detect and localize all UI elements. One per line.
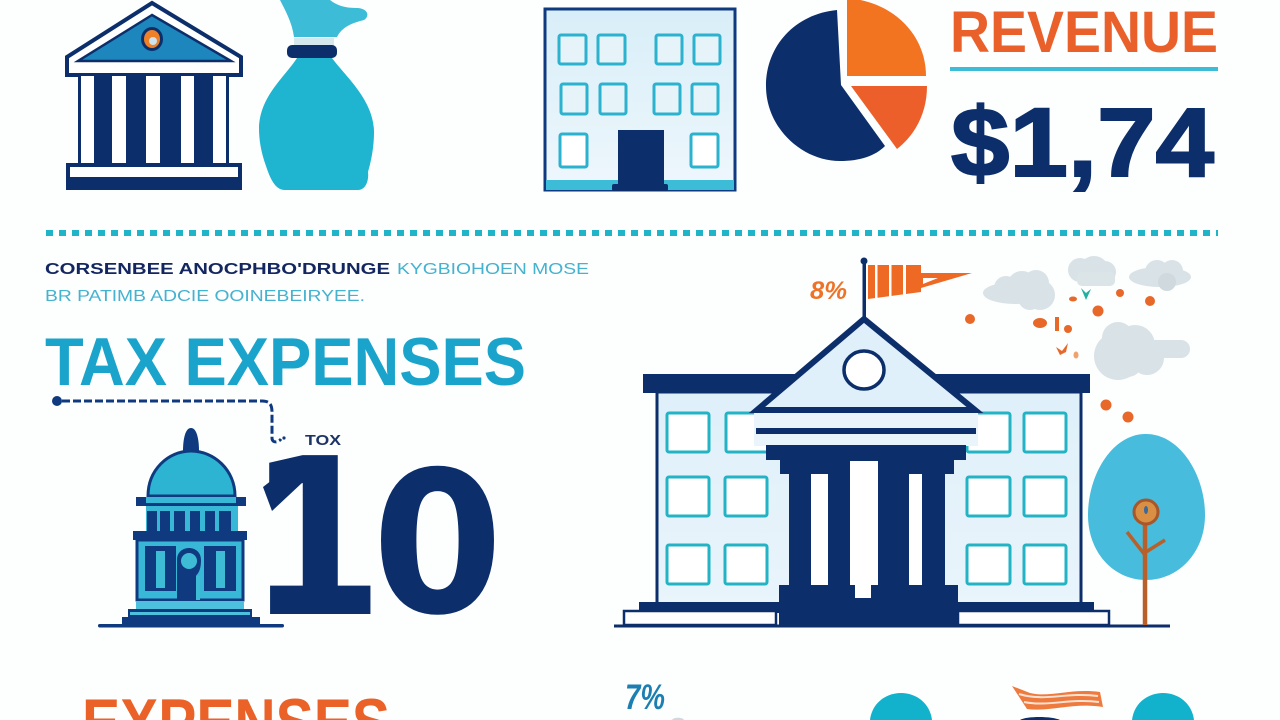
dashed connector arrow	[52, 396, 286, 442]
building windows	[667, 413, 1066, 584]
bottom small marker	[672, 718, 684, 720]
bottom left tree	[870, 693, 932, 720]
icon: office building	[545, 9, 735, 191]
revenue divider	[950, 67, 1218, 71]
capitol finial	[183, 428, 199, 451]
big tax figure: 0	[372, 430, 503, 659]
revenue figure: $1,74	[951, 88, 1214, 197]
floating orange coins and marks	[965, 288, 1155, 422]
percentage label: 7%	[625, 678, 665, 717]
bank medallion	[141, 27, 163, 51]
entablature	[754, 412, 978, 446]
intro text block	[45, 261, 589, 305]
bank base	[66, 163, 242, 190]
icon: bank building	[66, 3, 242, 190]
office door	[612, 130, 668, 191]
portico columns	[766, 445, 966, 626]
pediment with round window	[757, 319, 975, 410]
bottom right tree	[1132, 693, 1194, 720]
heading: tax expenses: TAX EXPENSES	[45, 324, 526, 400]
icon: capitol building	[98, 428, 284, 628]
building steps	[614, 602, 1170, 628]
bank pediment	[78, 15, 231, 61]
dotted section divider	[46, 230, 1218, 236]
capitol dome	[148, 451, 235, 496]
office windows	[559, 35, 720, 167]
heading: revenue: REVENUE	[950, 0, 1218, 65]
pie chart	[766, 0, 927, 161]
bottom flag and dome	[1012, 686, 1103, 720]
capitol steps	[98, 601, 284, 628]
big tax figure	[247, 413, 503, 666]
bank columns	[78, 76, 229, 164]
clouds	[983, 256, 1191, 380]
intro text block: CORSENBEE ANOCPHBO'DRUNGE	[45, 261, 390, 278]
office floor band	[546, 180, 734, 190]
intro text block: BR PATIMB ADCIE OOINEBEIRYEE.	[45, 288, 365, 305]
capitol drum	[133, 497, 247, 540]
capitol lower storey	[137, 540, 243, 600]
icon: tree	[1088, 434, 1205, 625]
icon: money bag	[259, 0, 374, 190]
percentage label on flag: 8%	[810, 277, 847, 305]
building wings	[657, 392, 1081, 604]
illustration: main government building	[614, 319, 1170, 628]
intro text block: KYGBIOHOEN MOSE	[397, 261, 589, 278]
big tax figure: 1	[247, 413, 384, 666]
tax label: TOX	[305, 432, 341, 449]
flag on building	[860, 258, 972, 318]
roof slab	[643, 374, 1090, 393]
